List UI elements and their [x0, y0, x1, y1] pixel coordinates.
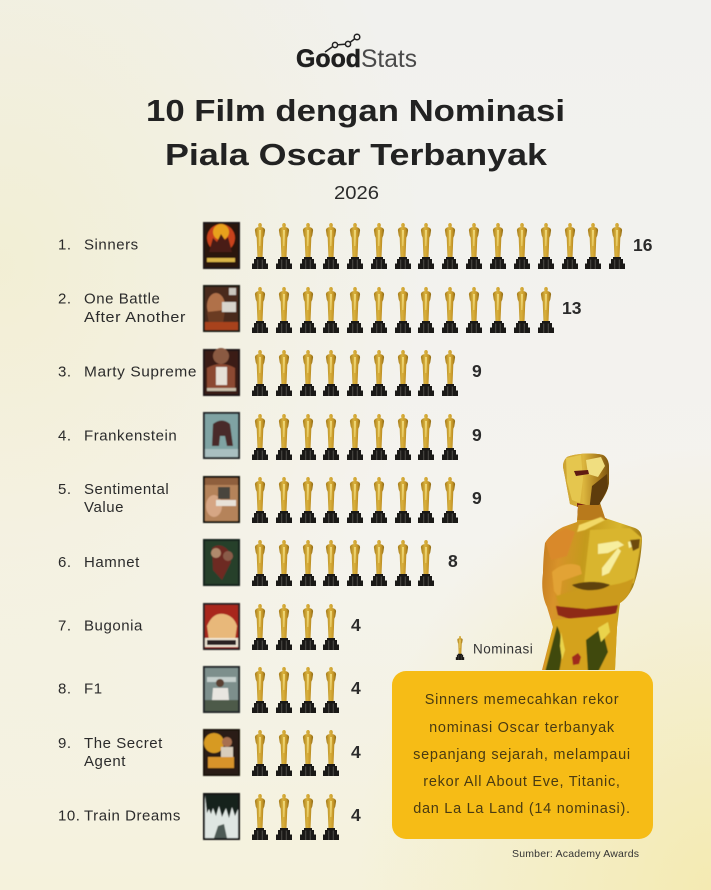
title	[146, 93, 565, 172]
row 9: The Secret Agent: The Secret	[84, 735, 163, 752]
statuettes: 8	[252, 540, 434, 586]
poster: Frankenstein	[203, 412, 240, 459]
row 9: The Secret Agent: 4	[351, 742, 361, 762]
poster: Sentimental Value	[203, 476, 240, 523]
statuettes: 4	[252, 604, 339, 650]
row 2: One Battle After Another	[58, 285, 582, 333]
row 9: The Secret Agent: 9.	[58, 735, 72, 752]
title: Piala Oscar Terbanyak	[165, 137, 548, 172]
row 2: One Battle After Another: 13	[562, 298, 582, 318]
row 6: Hamnet: Hamnet	[84, 554, 140, 571]
source: Sumber: Academy Awards	[512, 848, 639, 860]
row 6: Hamnet: 8	[448, 551, 458, 571]
row 4: Frankenstein: Frankenstein	[84, 428, 177, 444]
poster: One Battle After Another	[203, 285, 240, 332]
row 10: Train Dreams: 10.	[58, 808, 81, 824]
callout: Sinners memecahkan rekor	[425, 692, 619, 708]
row 3: Marty Supreme	[58, 348, 482, 396]
row 1: Sinners: 1.	[58, 236, 72, 254]
statuettes: 4	[252, 794, 339, 840]
logo: GoodStats	[296, 34, 417, 73]
row 3: Marty Supreme: Marty Supreme	[84, 364, 197, 380]
row 10: Train Dreams: Train Dreams	[84, 808, 181, 824]
row 3: Marty Supreme: 3.	[58, 364, 72, 380]
crossed forearm	[552, 564, 634, 621]
logo: GoodStats: Good	[296, 45, 361, 73]
row 10: Train Dreams: 4	[351, 805, 361, 825]
row 8: F1: 8.	[58, 680, 72, 698]
row 4: Frankenstein	[58, 412, 482, 460]
statuettes: 4	[252, 667, 339, 713]
poster: Hamnet	[203, 539, 240, 586]
row 4: Frankenstein: 9	[472, 425, 482, 445]
row 7: Bugonia	[58, 603, 361, 650]
callout	[392, 671, 653, 839]
row 1: Sinners: 16	[633, 235, 653, 255]
row 2: One Battle After Another: After Another	[84, 309, 186, 326]
statuettes: 4	[252, 730, 339, 776]
row 2: One Battle After Another: 2.	[58, 290, 72, 308]
poster: Bugonia	[203, 603, 240, 650]
poster: Sinners	[203, 222, 240, 269]
callout: nominasi Oscar terbanyak	[429, 720, 615, 736]
row 6: Hamnet: 6.	[58, 554, 72, 571]
poster: Marty Supreme	[203, 348, 240, 396]
title: 10 Film dengan Nominasi	[146, 93, 565, 128]
row 5: Sentimental Value	[58, 476, 482, 523]
legend: Nominasi	[473, 642, 533, 656]
row 8: F1: F1	[84, 680, 103, 698]
chest highlights	[545, 517, 642, 588]
row 5: Sentimental Value: 5.	[58, 481, 72, 498]
callout: rekor All About Eve, Titanic,	[423, 774, 621, 790]
statuettes: 13	[252, 287, 554, 333]
row 1: Sinners: Sinners	[84, 236, 139, 254]
statuettes: 9	[252, 350, 458, 396]
row 6: Hamnet	[58, 539, 458, 586]
statuettes: 9	[252, 414, 458, 460]
row 3: Marty Supreme: 9	[472, 361, 482, 381]
row 7: Bugonia: 4	[351, 615, 361, 635]
poster: Train Dreams	[203, 793, 240, 840]
year subtitle: 2026	[334, 183, 379, 203]
statuettes: 16	[252, 223, 625, 269]
row 4: Frankenstein: 4.	[58, 428, 72, 444]
row 5: Sentimental Value: Value	[84, 499, 124, 516]
legs	[544, 614, 620, 672]
row 2: One Battle After Another: One Battle	[84, 290, 160, 308]
statuettes: 9	[252, 477, 458, 523]
row 8: F1	[58, 666, 361, 713]
row 8: F1: 4	[351, 678, 361, 698]
head and neck	[563, 454, 609, 520]
row 9: The Secret Agent	[58, 729, 361, 776]
row 5: Sentimental Value: Sentimental	[84, 481, 169, 498]
row 7: Bugonia: Bugonia	[84, 618, 143, 634]
row 9: The Secret Agent: Agent	[84, 753, 126, 770]
callout: sepanjang sejarah, melampaui	[413, 747, 631, 763]
row 5: Sentimental Value: 9	[472, 488, 482, 508]
poster: The Secret Agent	[203, 729, 240, 776]
legend	[456, 636, 533, 660]
row 7: Bugonia: 7.	[58, 618, 72, 634]
poster: F1	[203, 666, 240, 713]
callout: dan La La Land (14 nominasi).	[413, 801, 631, 817]
large Oscar statue	[540, 450, 645, 672]
row 10: Train Dreams	[58, 793, 361, 840]
row 1: Sinners	[58, 222, 653, 269]
logo: GoodStats: Stats	[361, 45, 417, 73]
